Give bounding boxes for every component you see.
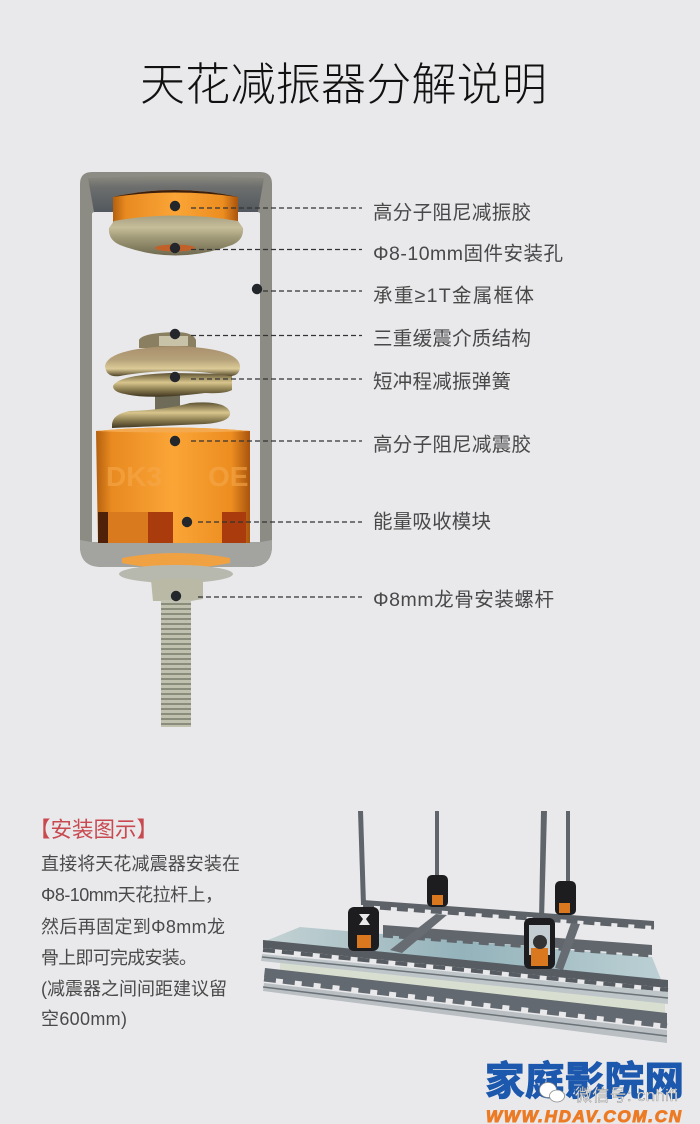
title: 天花减振器分解说明 [140, 59, 547, 110]
embossed mark right: OE [208, 461, 248, 492]
installation heading: 【安装图示】 [29, 818, 158, 842]
lower metal washer [119, 565, 233, 583]
installation description: 空600mm) [41, 1009, 127, 1029]
diagonal braces [390, 914, 580, 970]
installation description: 骨上即可完成安装。 [41, 948, 197, 968]
ceiling board [263, 927, 662, 982]
icon: wechat [540, 1082, 564, 1102]
front rail teeth [263, 950, 668, 990]
installation illustration [261, 811, 668, 1043]
feature labels: 高分子阻尼减振胶 [373, 202, 531, 224]
upper orange damping rubber [113, 190, 238, 226]
feature labels: 高分子阻尼减震胶 [373, 434, 531, 456]
hanger: front left [348, 907, 379, 951]
installation description [41, 854, 240, 1029]
wechat id: 微信号: cnhifi [575, 1086, 678, 1105]
back rail [383, 925, 652, 955]
lower rail highlight [263, 983, 667, 1043]
hanger: front right [524, 918, 555, 969]
spring coils [105, 346, 240, 428]
lower rail teeth [264, 979, 667, 1026]
metal frame [80, 172, 272, 567]
logo name: 家庭影院网 [485, 1060, 684, 1104]
installation description: 然后再固定到Φ8mm龙 [41, 917, 225, 937]
front rail highlight [261, 954, 668, 1004]
feature labels: 短冲程减振弹簧 [373, 371, 511, 393]
installation description: (减震器之间间距建议留 [41, 979, 227, 999]
front main rail [263, 940, 668, 988]
upper rubber top edge [113, 190, 238, 197]
feature labels [373, 202, 563, 611]
embossed mark left: DK3 [106, 461, 162, 492]
hanger: back left [427, 875, 448, 907]
installation description: 直接将天花减震器安装在 [41, 854, 240, 874]
threaded rod [161, 600, 191, 727]
lower orange washer [122, 553, 230, 568]
feature labels: Φ8mm龙骨安装螺杆 [373, 589, 554, 611]
orange damping block [96, 428, 250, 543]
energy absorption module slots [98, 512, 246, 543]
block top highlight [96, 428, 250, 432]
watermark logo [485, 1060, 684, 1124]
T-bolt head [151, 578, 203, 601]
installation description: Φ8-10mm天花拉杆上， [41, 885, 223, 905]
lower rail groove [263, 987, 667, 1036]
callout lines and dots [170, 201, 362, 601]
feature labels: 能量吸收模块 [373, 511, 491, 533]
feature labels: 三重缓震介质结构 [373, 328, 531, 350]
lower board strip [280, 958, 665, 1016]
hanging rods [358, 811, 570, 920]
lower main rail [264, 968, 667, 1024]
feature labels: 承重≥1T金属框体 [373, 285, 534, 307]
bolt head [139, 332, 196, 348]
hanger: back right [555, 881, 576, 915]
back rail teeth [383, 936, 652, 956]
mounting hole [155, 244, 195, 252]
upper cross rail teeth [363, 906, 654, 928]
front rail groove [262, 957, 668, 998]
nut highlight [159, 336, 188, 346]
frame top inner shading [88, 176, 264, 212]
diagram: exploded shock absorber [80, 172, 272, 727]
feature labels: Φ8-10mm固件安装孔 [373, 243, 563, 265]
frame bottom band [80, 540, 272, 567]
upper metal washer [109, 216, 243, 256]
upper cross rail [363, 900, 654, 926]
